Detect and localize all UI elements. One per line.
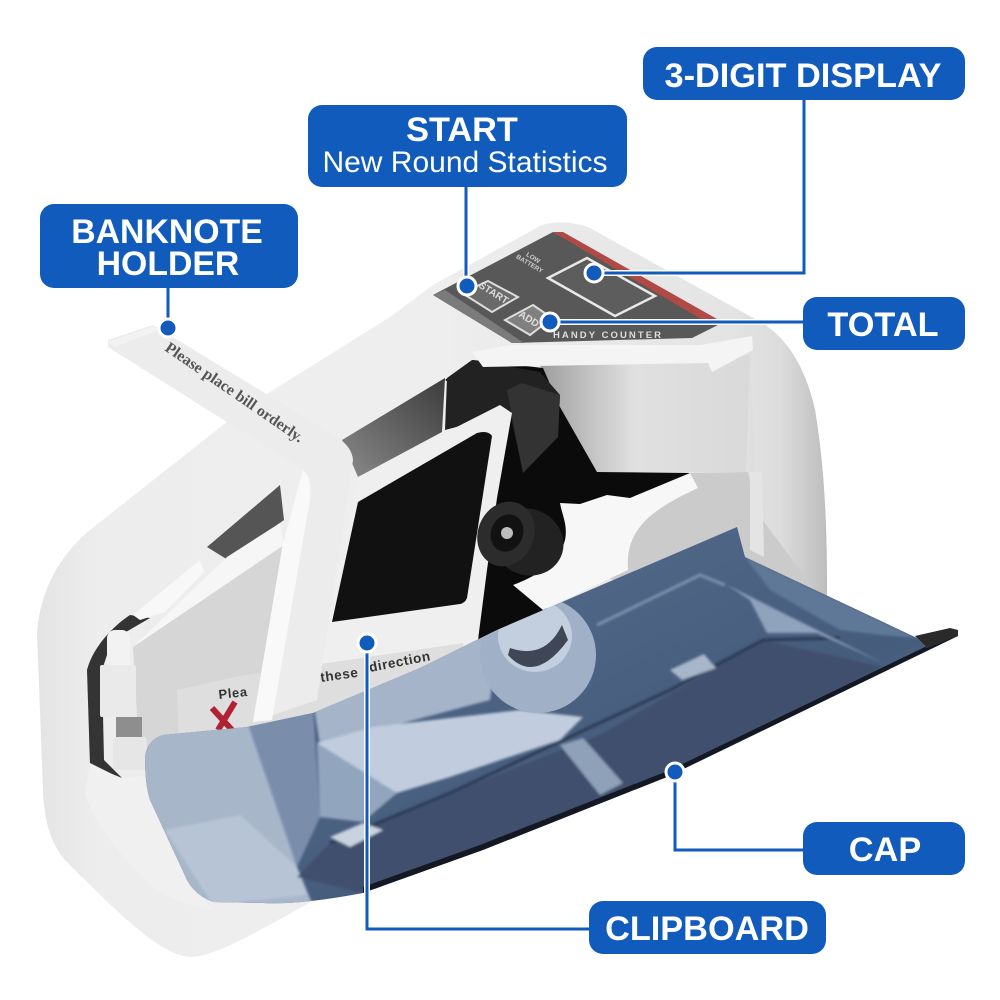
control panel: HANDY COUNTER — [553, 330, 661, 341]
callout: clipboard: CLIPBOARD — [605, 910, 809, 948]
feed base grey — [600, 472, 815, 590]
cap inner shading — [135, 557, 917, 915]
cap mid section — [247, 708, 320, 867]
product photo: banknote counter — [37, 222, 970, 957]
dark slot upper — [342, 378, 445, 477]
pale strip by flank — [750, 472, 764, 557]
black cavity — [445, 360, 690, 640]
callout: banknote holder: BANKNOTE — [71, 213, 263, 251]
knob — [468, 493, 575, 587]
callout: total: TOTAL — [827, 306, 939, 344]
control panel: ADD — [516, 309, 541, 330]
cap sticker seen through — [313, 630, 500, 745]
callout: banknote holder: HOLDER — [97, 245, 239, 283]
cap end tab — [915, 628, 958, 648]
cap tabs — [330, 823, 383, 847]
clip plate: Plea — [218, 684, 248, 702]
clip plate: these — [319, 665, 359, 685]
callout: cap: CAP — [849, 831, 921, 869]
control panel: BATTERY — [515, 254, 544, 275]
clip plate — [177, 405, 512, 775]
hinge — [100, 630, 147, 770]
holder arm with label: Please place bill orderly. — [162, 339, 307, 446]
dark block behind plate — [445, 360, 560, 473]
cap finger scoop — [480, 597, 596, 713]
callout: banknote holder — [40, 204, 298, 337]
left dark gap — [87, 615, 150, 778]
transparent cap — [135, 520, 970, 920]
cap pale block — [317, 710, 583, 793]
callout: start: New Round Statistics — [322, 146, 608, 179]
cap pale block side — [317, 743, 397, 822]
callout: 3-digit display: 3-DIGIT DISPLAY — [665, 57, 942, 95]
callout: 3-digit display — [585, 47, 965, 282]
callout: total — [541, 297, 965, 350]
machine body — [37, 222, 827, 957]
right flank — [712, 320, 827, 610]
callout: start — [308, 105, 627, 295]
left recess panel — [133, 545, 283, 770]
control panel: START — [476, 280, 510, 307]
front sill — [85, 763, 213, 910]
callout: clipboard — [358, 634, 826, 954]
cap dark lower edge — [363, 630, 958, 893]
white feed bracket — [513, 473, 698, 610]
inner recess — [540, 355, 750, 472]
clip plate: direction — [368, 648, 432, 675]
cap upper ridges — [597, 575, 725, 625]
cap left lower tint — [165, 815, 307, 905]
lip under panel — [472, 336, 753, 372]
control panel — [433, 232, 718, 343]
cap ridge line — [330, 638, 840, 843]
cap left pale section — [135, 720, 315, 915]
hinge lever — [133, 560, 204, 620]
control panel: LOW — [525, 251, 542, 266]
dark slot lower — [207, 485, 284, 560]
cap pale vertical — [560, 738, 623, 795]
holder arm with label — [108, 325, 353, 722]
cap dark lower — [297, 640, 883, 893]
hinge arm white — [133, 523, 284, 647]
callout: cap — [666, 763, 965, 875]
callout: start: START — [406, 111, 518, 149]
